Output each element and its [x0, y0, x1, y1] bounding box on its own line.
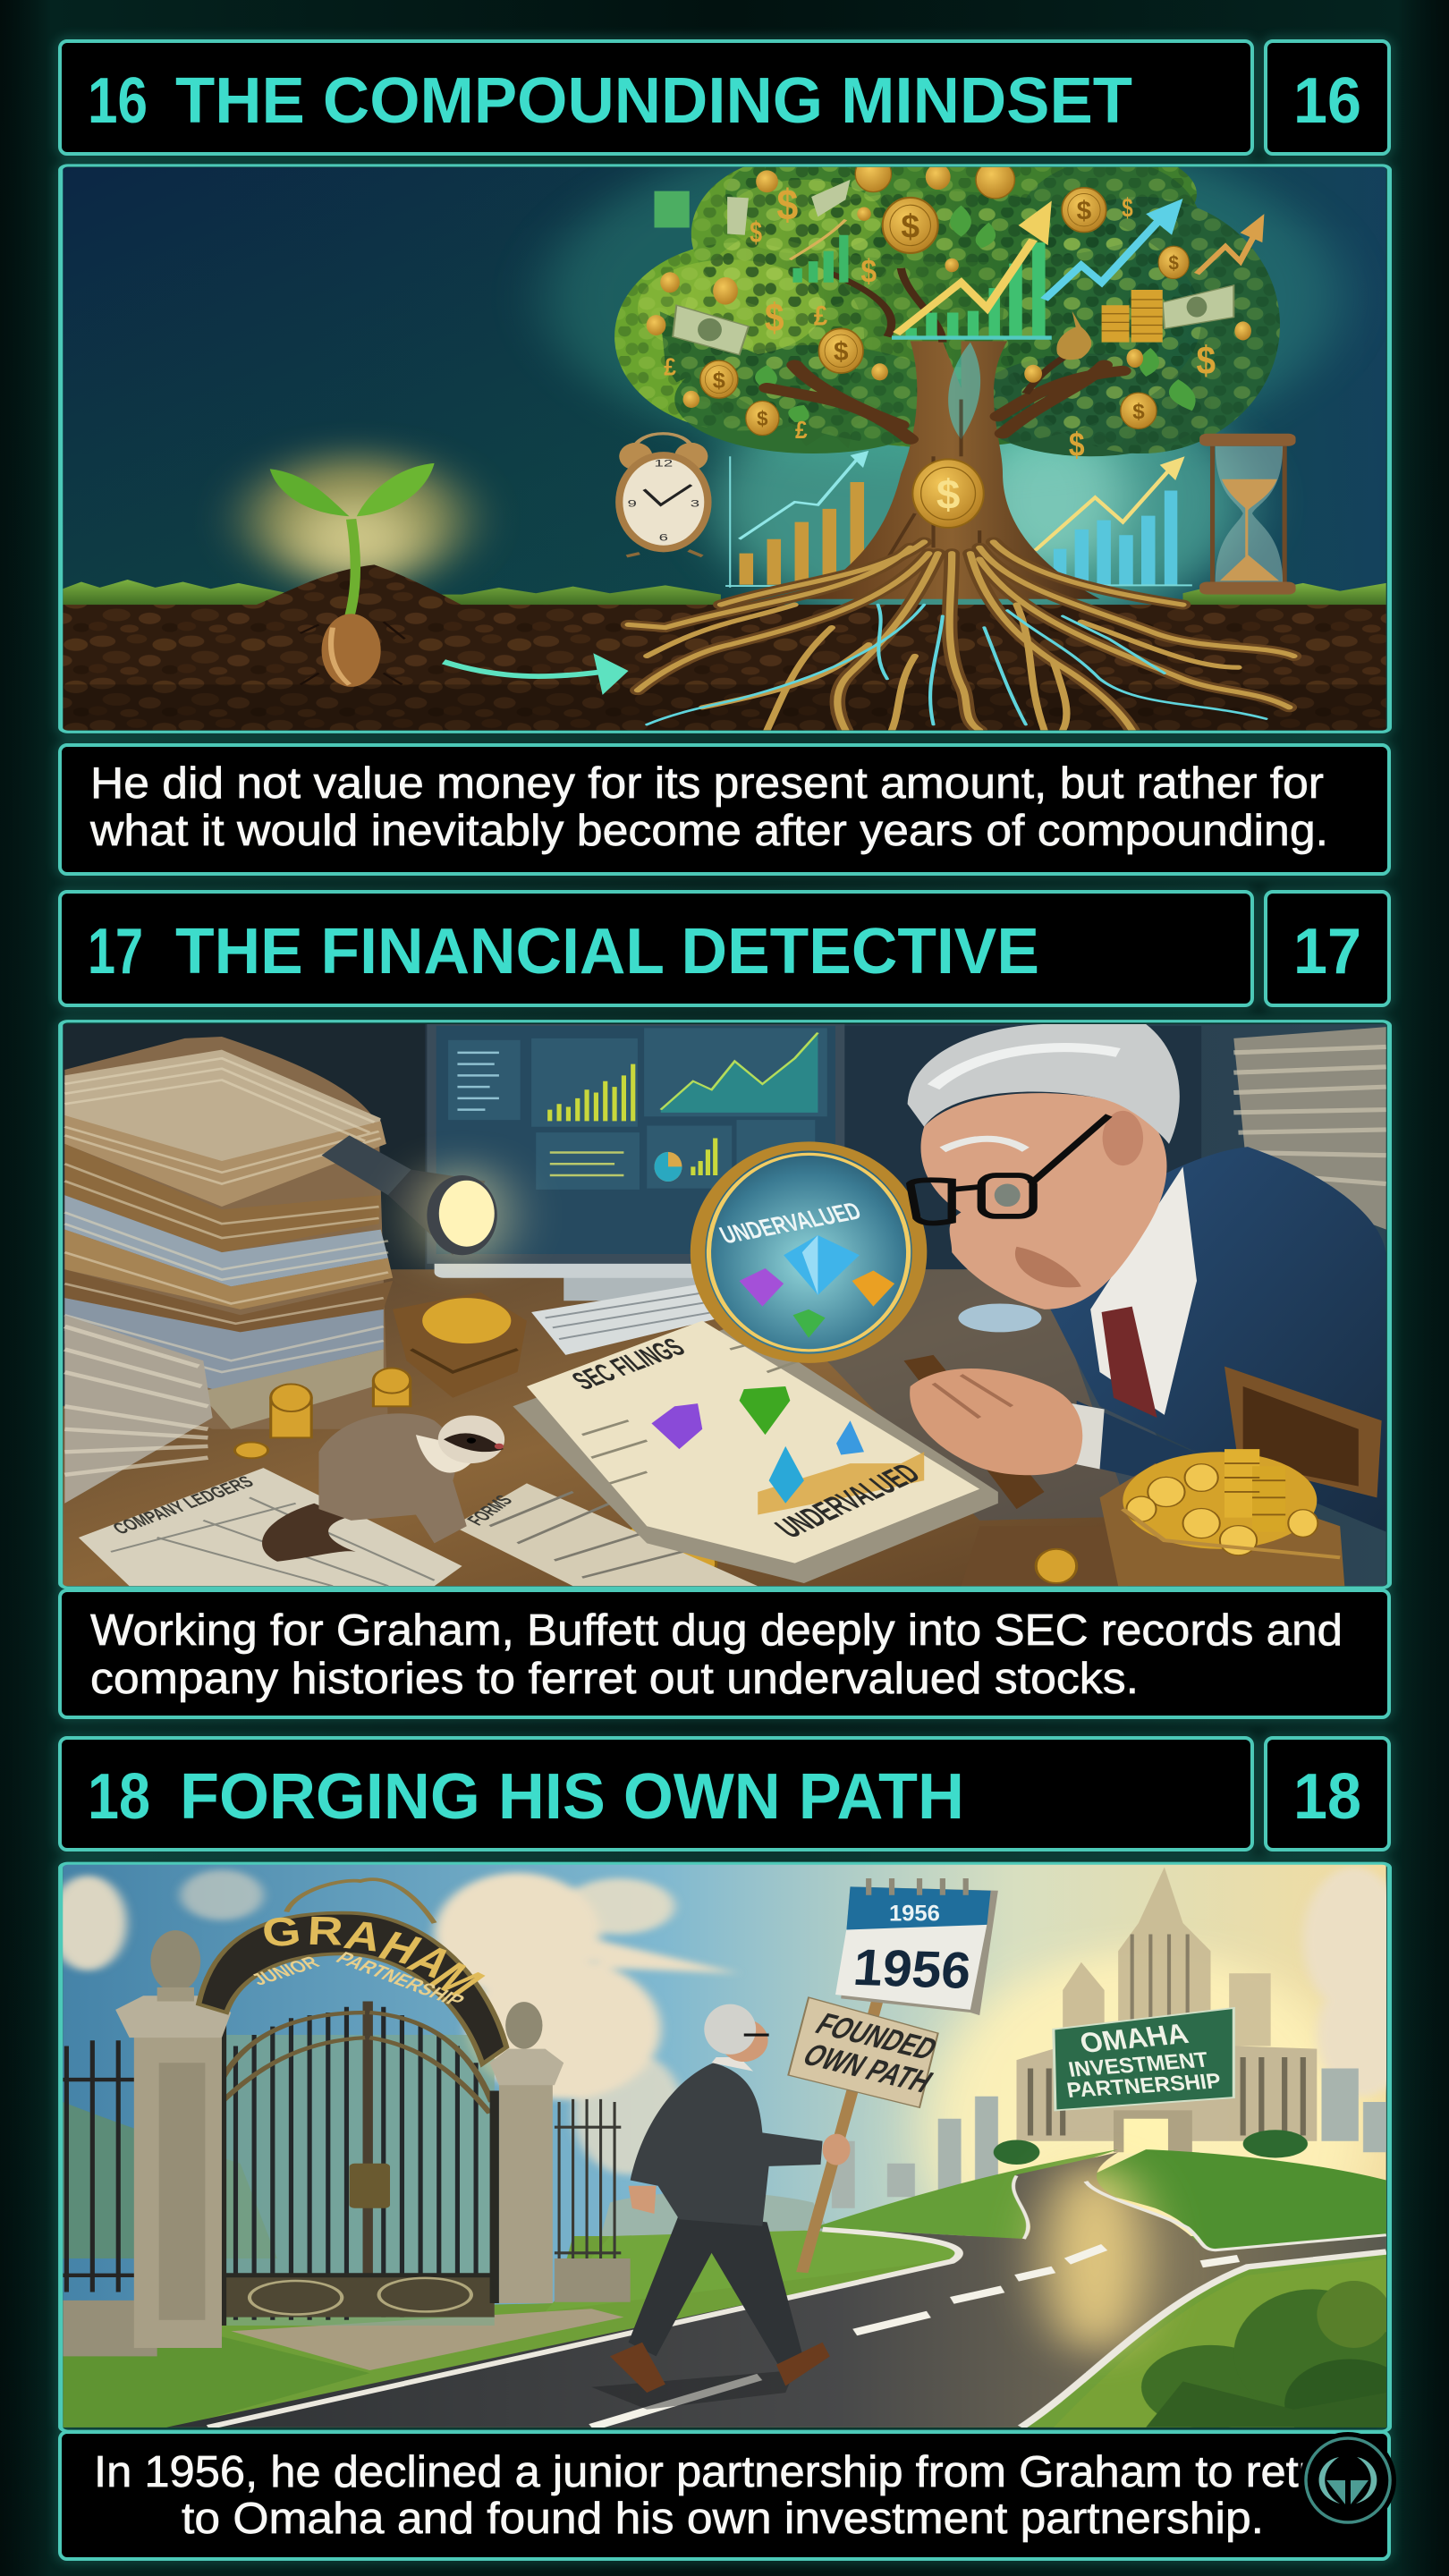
icon: small treasure chest — [393, 1292, 527, 1398]
tree trunk — [767, 268, 1123, 599]
sign: Omaha investment partnership: INVESTMENT — [1066, 2048, 1211, 2082]
logo: circular emblem — [1300, 2432, 1396, 2529]
figure: Buffett with suit and glasses — [908, 1024, 1386, 1532]
section 16: number badge — [1266, 41, 1389, 154]
icon: alarm clock: 6 — [659, 532, 668, 544]
coins and dollar bills on the tree: $ — [834, 337, 849, 367]
heading: the financial detective: 17 — [88, 916, 143, 987]
icon: calendar 1956: 1956 — [889, 1902, 940, 1926]
paper: forms: FORMS — [463, 1493, 518, 1529]
section 17: number badge — [1266, 892, 1389, 1005]
Graham gate: A — [339, 1911, 387, 1960]
sign: founded own path — [788, 1997, 945, 2107]
documents: SEC filings: UNDERVALUED — [767, 1458, 928, 1544]
caption 16: what it would inevitably become after years of compounding. — [89, 807, 1328, 855]
section 18: heading bar — [60, 1738, 1252, 1850]
road — [166, 2152, 1386, 2428]
icon: magnifying glass: UNDERVALUED — [716, 1198, 866, 1250]
icon: alarm clock: 3 — [691, 498, 699, 509]
section 16: number badge: 16 — [1293, 65, 1361, 137]
icon: calendar 1956: 1956 — [852, 1939, 973, 2000]
paper: forms — [453, 1483, 758, 1586]
coins and dollar bills on the tree: $ — [1197, 337, 1216, 382]
caption 17: Working for Graham, Buffett dug deeply into SEC records and — [90, 1606, 1343, 1655]
coins and dollar bills on the tree: $ — [776, 181, 798, 229]
sign: founded own path: FOUNDED — [809, 2006, 945, 2066]
heading: the compounding mindset: 16 — [88, 65, 148, 137]
section 17: number badge: 17 — [1293, 916, 1361, 987]
caption 18: to Omaha and found his own investment partnership. — [182, 2495, 1264, 2543]
seed and sprout — [270, 463, 435, 687]
coins and dollar bills on the tree: $ — [1122, 192, 1133, 223]
caption 17: company histories to ferret out undervalued stocks. — [90, 1655, 1139, 1703]
coins and dollar bills on the tree: $ — [860, 254, 877, 290]
coins and dollar bills on the tree — [647, 156, 1251, 464]
sign: Omaha investment partnership: OMAHA — [1077, 2017, 1191, 2059]
coins and dollar bills on the tree: $ — [1077, 196, 1092, 226]
computer monitor with charts — [427, 1024, 845, 1301]
caption 18: In 1956, he declined a junior partnership from Graham to return — [94, 2448, 1364, 2496]
central coin on trunk: $ — [936, 471, 960, 517]
desk — [63, 1269, 1156, 1586]
bush foreground — [1141, 2281, 1414, 2449]
caption 16: He did not value money for its present amount, but rather for — [90, 759, 1324, 808]
heading: the compounding mindset: THE COMPOUNDING MINDSET — [175, 65, 1132, 137]
icon: flashlight — [322, 1135, 506, 1267]
coins and dollar bills on the tree: $ — [1168, 253, 1179, 274]
keyboard and mouse — [531, 1284, 1041, 1355]
Graham gate: PARTNERSHIP — [331, 1948, 470, 2011]
stack of documents — [64, 1037, 393, 1504]
building: Omaha partnership — [1017, 1868, 1317, 2154]
Graham gate: R — [306, 1908, 344, 1953]
paper: company ledgers — [79, 1468, 462, 1586]
Graham gate: A — [397, 1937, 465, 1987]
documents: SEC filings: SEC FILINGS — [565, 1333, 691, 1395]
heading: the financial detective: THE FINANCIAL DETECTIVE — [175, 916, 1039, 987]
coins and dollar bills on the tree: $ — [713, 368, 725, 393]
coins and dollar bills on the tree: $ — [765, 294, 784, 340]
Graham gate — [63, 1879, 631, 2356]
section 18: number badge: 18 — [1293, 1761, 1361, 1833]
distant hills and skyline — [63, 2068, 1386, 2258]
Graham gate: G — [259, 1908, 304, 1955]
heading: forging his own path: FORGING HIS OWN PATH — [180, 1761, 964, 1833]
coins and dollar bills on the tree: $ — [1132, 400, 1145, 424]
panel: compounding tree illustration — [61, 125, 1389, 732]
chart: green bars and gold arrow in canopy — [655, 191, 1264, 338]
section 18: number badge — [1266, 1738, 1389, 1850]
coins and dollar bills on the tree: $ — [901, 207, 919, 244]
Graham gate: H — [370, 1922, 431, 1972]
panel: financial detective illustration — [61, 1021, 1389, 1588]
icon: calendar 1956 — [835, 1878, 998, 2015]
icon: ferret — [262, 1413, 504, 1562]
icon: magnifying glass — [698, 1146, 1045, 1509]
section 16: heading bar — [60, 41, 1252, 154]
coins and dollar bills on the tree: £ — [795, 415, 808, 444]
chart: lower right blue bars — [1026, 456, 1192, 585]
Graham gate: JUNIOR — [248, 1953, 324, 1989]
cobblestone path — [231, 2309, 623, 2370]
Graham gate: M — [418, 1955, 496, 2005]
tree canopy — [614, 166, 1280, 456]
paper: company ledgers: COMPANY LEDGERS — [108, 1472, 258, 1538]
icon: treasure chest with coins — [1036, 1367, 1382, 1586]
figure: man walking with sign — [591, 1998, 878, 2410]
icon: alarm clock: 9 — [628, 498, 637, 509]
arrow: seed to tree — [444, 653, 629, 695]
chart: lower left orange bars — [725, 451, 878, 588]
caption 16 — [60, 745, 1389, 874]
panel: forging his own path illustration — [49, 1863, 1414, 2449]
coins and dollar bills on the tree: £ — [814, 301, 828, 332]
coins and dollar bills on the tree: $ — [1069, 427, 1085, 464]
grass hills — [63, 2130, 1386, 2428]
tree roots — [629, 542, 1293, 730]
sign: Omaha investment partnership: PARTNERSHIP — [1065, 2070, 1223, 2103]
icon: alarm clock: 12 — [655, 458, 673, 470]
icon: hourglass — [1199, 434, 1296, 595]
clouds — [49, 1868, 1410, 2174]
coins and dollar bills on the tree: £ — [664, 352, 676, 381]
central coin on trunk — [912, 459, 984, 528]
caption 17 — [60, 1590, 1389, 1717]
caption 18 — [60, 2432, 1389, 2559]
heading: forging his own path: 18 — [88, 1761, 150, 1833]
icon: coin stacks on desk — [234, 1368, 716, 1580]
coins and dollar bills on the tree: $ — [757, 408, 768, 430]
icon: alarm clock — [615, 434, 712, 556]
sign: Omaha investment partnership — [1054, 2008, 1233, 2110]
sign: founded own path: OWN PATH — [796, 2037, 940, 2098]
coins and dollar bills on the tree: $ — [750, 216, 762, 250]
documents: SEC filings — [513, 1321, 998, 1583]
ground: grass and soil — [63, 564, 1386, 730]
right paper stack — [1233, 1027, 1386, 1230]
section 17: heading bar — [60, 892, 1252, 1005]
